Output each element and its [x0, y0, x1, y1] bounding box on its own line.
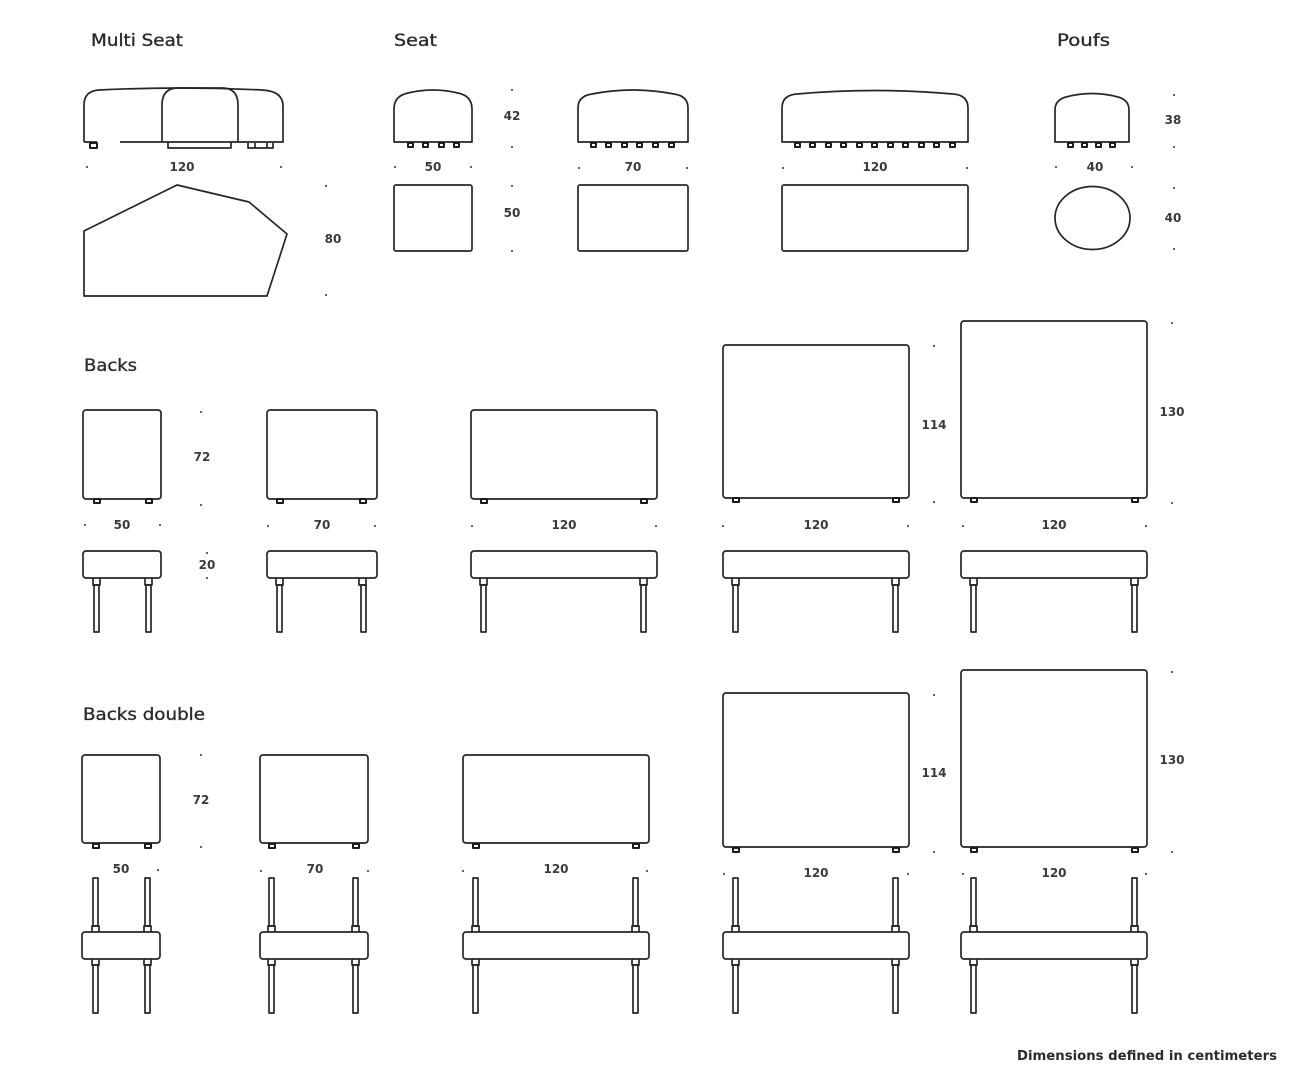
- back double side view 120 h130: [961, 878, 1147, 1013]
- back double side view 120: [463, 878, 649, 1013]
- back side view 120: [471, 551, 657, 632]
- dimension numbers: 38: [1165, 113, 1181, 127]
- dimension numbers: 42: [504, 109, 520, 123]
- dimension numbers: 130: [1159, 405, 1185, 419]
- dimension numbers: 20: [199, 558, 215, 572]
- back double side view 50: [82, 878, 160, 1013]
- dimension numbers: 50: [114, 518, 130, 532]
- heading: Poufs: Poufs: [1057, 31, 1110, 51]
- back 70: [267, 410, 377, 503]
- dimension numbers: 70: [625, 160, 641, 174]
- seat 50 plan view: [394, 185, 472, 251]
- dimension numbers: 120: [1041, 866, 1067, 880]
- back 120 h114: [723, 345, 909, 502]
- dimension numbers: 120: [169, 160, 195, 174]
- back side view 50: [83, 551, 161, 632]
- dimension numbers: 120: [543, 862, 569, 876]
- seat 70 plan view: [578, 185, 688, 251]
- dimension numbers: 120: [803, 518, 829, 532]
- back side view 120 h130: [961, 551, 1147, 632]
- dimension numbers: 130: [1159, 753, 1185, 767]
- dimension numbers: 80: [325, 232, 341, 246]
- back double 70: [260, 755, 368, 848]
- dimension numbers: 114: [921, 418, 947, 432]
- back 120 h130: [961, 321, 1147, 502]
- seat 70 front view: [578, 90, 688, 147]
- dimension numbers: 50: [113, 862, 129, 876]
- back 50: [83, 410, 161, 503]
- multi seat front view: [84, 88, 283, 148]
- dimension numbers: 72: [194, 450, 210, 464]
- dimension numbers: 120: [803, 866, 829, 880]
- back double 120 h130: [961, 670, 1147, 852]
- dimension numbers: 40: [1165, 211, 1181, 225]
- footnote: Dimensions defined in centimeters: [1017, 1049, 1277, 1064]
- heading: Multi Seat: Multi Seat: [91, 31, 183, 51]
- dimension numbers: 120: [551, 518, 577, 532]
- dimension numbers: 70: [314, 518, 330, 532]
- seat 120 front view: [782, 90, 968, 147]
- back double side view 120 h114: [723, 878, 909, 1013]
- back double 120 h114: [723, 693, 909, 852]
- back double side view 70: [260, 878, 368, 1013]
- dimension numbers: 120: [862, 160, 888, 174]
- dimension numbers: 70: [307, 862, 323, 876]
- back double 50: [82, 755, 160, 848]
- dimension numbers: 50: [425, 160, 441, 174]
- back side view 120 h114: [723, 551, 909, 632]
- dimension numbers: 114: [921, 766, 947, 780]
- dimension numbers: 120: [1041, 518, 1067, 532]
- back side view 70: [267, 551, 377, 632]
- back double 120 h72: [463, 755, 649, 848]
- dimension numbers: 72: [193, 793, 209, 807]
- back 120 h72: [471, 410, 657, 503]
- dimension numbers: 40: [1087, 160, 1103, 174]
- dimension tick dots: [84, 89, 1175, 875]
- pouf plan view: [1055, 186, 1130, 250]
- heading: Seat: Seat: [394, 31, 437, 51]
- pouf front view: [1055, 94, 1129, 147]
- seat 50 front view: [394, 90, 472, 147]
- dimension numbers: [113, 109, 1185, 880]
- heading: Backs double: Backs double: [83, 705, 205, 725]
- seat 120 plan view: [782, 185, 968, 251]
- dimension numbers: 50: [504, 206, 520, 220]
- heading: Backs: Backs: [84, 356, 137, 376]
- multi seat plan view: [84, 185, 287, 296]
